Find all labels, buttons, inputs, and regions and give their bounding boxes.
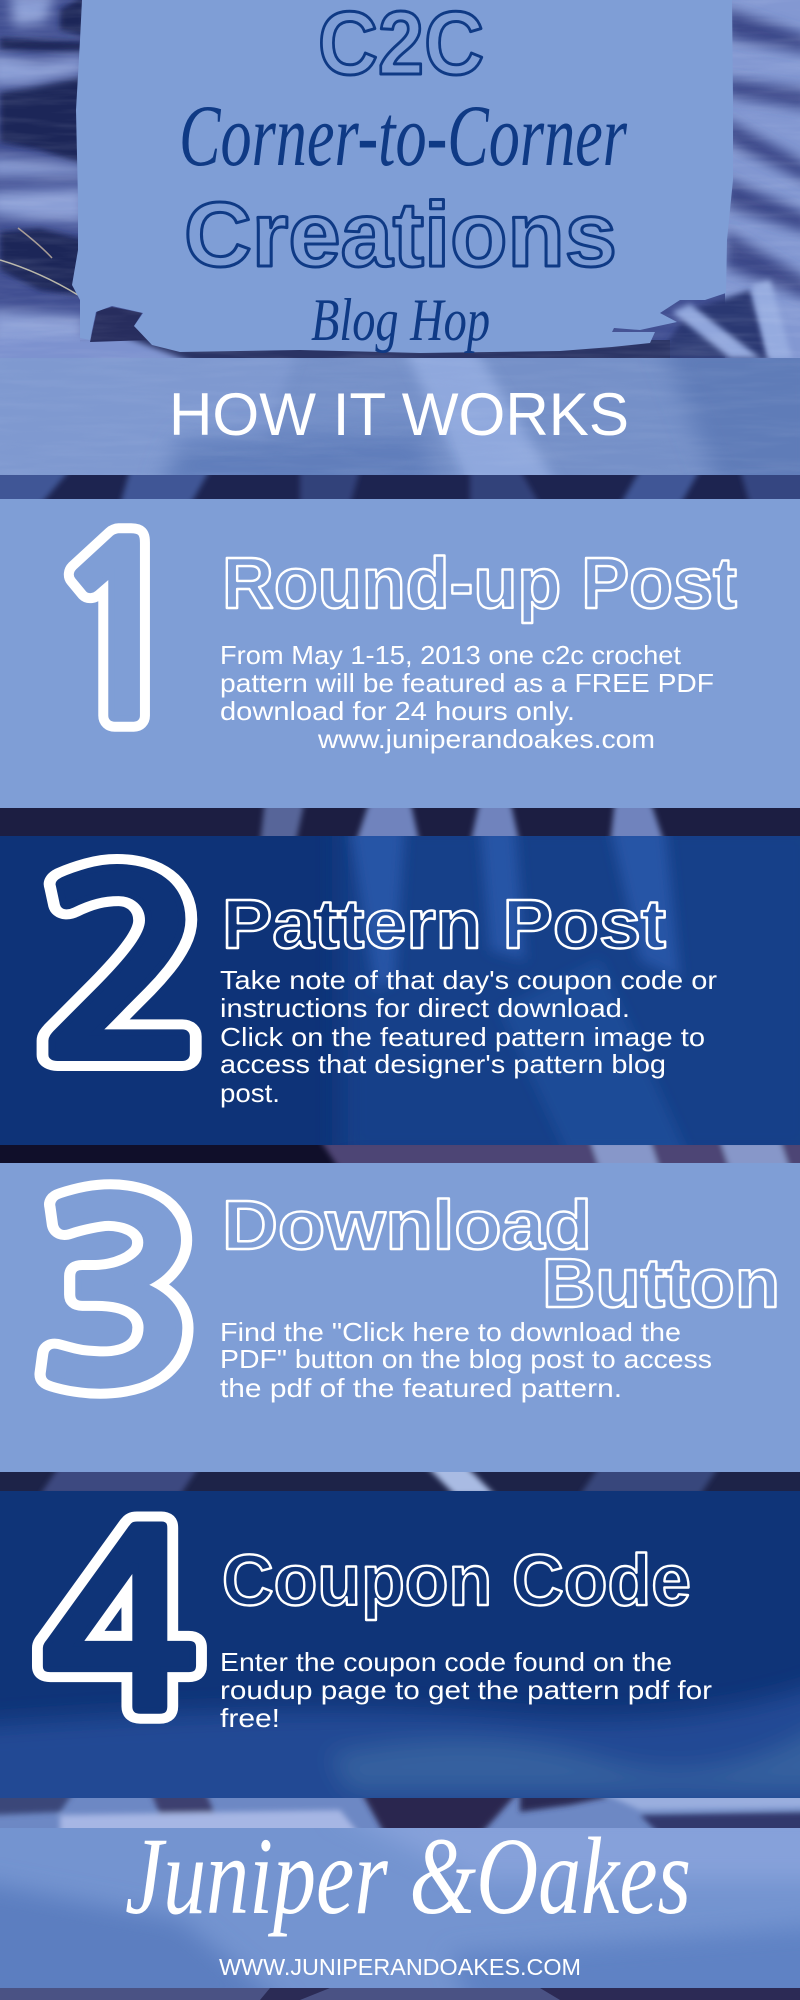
- subheading: Blog Hop: Blog Hop: [311, 287, 490, 353]
- number 2: 2: [35, 849, 213, 1094]
- footer band: [0, 1828, 800, 1988]
- step 1 text: From May 1-15, 2013 one c2c crochet: [220, 640, 682, 670]
- heading: HOW IT WORKS: HOW IT WORKS: [169, 381, 629, 448]
- step 4 heading: Coupon Code: [222, 1541, 691, 1621]
- number 4: 4: [39, 1505, 200, 1747]
- website url: WWW.JUNIPERANDOAKES.COM: [219, 1954, 581, 1980]
- step 2 text: instructions for direct download.: [220, 993, 630, 1023]
- step 1 text: [220, 640, 714, 754]
- step 4 text: roudup page to get the pattern pdf for: [220, 1675, 712, 1705]
- number 2: 2: [35, 849, 213, 1094]
- number 1: 1: [46, 516, 191, 754]
- step 3 text: [220, 1317, 712, 1403]
- how it works band: [0, 358, 800, 475]
- heading: Corner-to-Corner: Corner-to-Corner: [179, 88, 628, 185]
- step 3 text: PDF" button on the blog post to access: [220, 1344, 712, 1374]
- step 3 text: the pdf of the featured pattern.: [220, 1373, 622, 1403]
- panel: step 2 pattern post: [0, 820, 800, 1160]
- step 2 heading: Pattern Post: [222, 885, 666, 963]
- step 3 heading line 2: Button: [542, 1244, 780, 1322]
- step 1 text: pattern will be featured as a FREE PDF: [220, 668, 714, 698]
- step 2 text: post.: [220, 1078, 280, 1108]
- step 2 text: Click on the featured pattern image to: [220, 1022, 705, 1052]
- step 2 text: [220, 965, 717, 1108]
- torn paper shape: [72, 0, 733, 353]
- panel: step 3 download button: [0, 1163, 800, 1472]
- number 4: 4: [39, 1505, 200, 1747]
- step 4 text: free!: [220, 1703, 280, 1733]
- step 3 text: Find the "Click here to download the: [220, 1317, 681, 1347]
- number 3: 3: [33, 1175, 202, 1421]
- title panel: [72, 0, 733, 353]
- step 2 text: Take note of that day's coupon code or: [220, 965, 717, 995]
- step 1 text: download for 24 hours only.: [220, 696, 575, 726]
- heading: Creations: Creations: [184, 184, 617, 286]
- step 1 text: www.juniperandoakes.com: [317, 724, 655, 754]
- step 2 text: access that designer's pattern blog: [220, 1049, 666, 1079]
- number 3: 3: [33, 1175, 202, 1421]
- step 1 heading: Round-up Post: [222, 544, 737, 624]
- step 4 text: Enter the coupon code found on the: [220, 1647, 672, 1677]
- step 3 heading line 1: Download: [222, 1186, 592, 1264]
- panel: step 1 round-up post: [0, 499, 800, 808]
- number 1: 1: [46, 516, 191, 754]
- step 4 text: [220, 1647, 712, 1733]
- panel: step 4 coupon code: [0, 1491, 800, 1830]
